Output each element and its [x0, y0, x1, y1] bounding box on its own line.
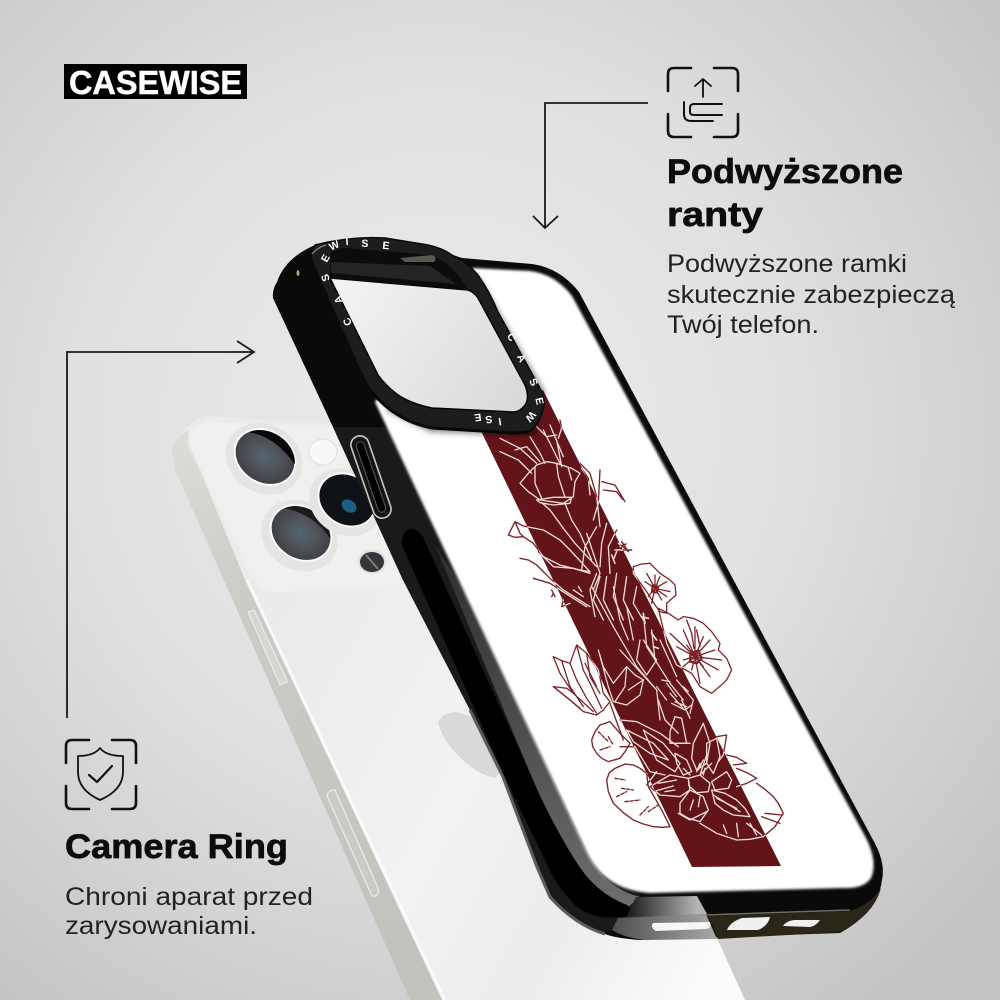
phone body	[172, 416, 745, 1000]
shell outer gray edge	[470, 710, 605, 934]
ring lettering: W	[522, 409, 538, 424]
heading: Podwyższone ranty: ranty	[667, 196, 763, 234]
stripe artwork	[482, 390, 783, 867]
arrow: raised edges	[533, 103, 648, 228]
inner wall	[330, 248, 468, 290]
lens right	[296, 455, 395, 550]
ring lettering: A	[514, 352, 528, 365]
corner highlights	[296, 245, 326, 276]
lidar sensor	[358, 550, 386, 574]
bottom separator	[706, 910, 850, 915]
edge highlight	[247, 580, 445, 1000]
ring lettering: S	[361, 238, 369, 250]
text: camera ring description: zarysowaniami.	[65, 912, 257, 940]
text: raised edges description	[667, 250, 955, 339]
phone side edge	[172, 430, 442, 1000]
text: raised edges description: Twój telefon.	[667, 311, 819, 339]
inner wall shade	[331, 262, 456, 284]
floral line art on stripe	[500, 420, 783, 840]
ring lettering: S	[485, 413, 493, 425]
white front face with soft edge	[375, 268, 874, 893]
ring lettering: I	[345, 236, 349, 248]
side inner gray band	[435, 545, 640, 908]
icon: raised edges	[668, 68, 738, 137]
ring lower edge	[372, 392, 528, 433]
heading: Podwyższone ranty: Podwyższone	[667, 153, 903, 191]
lens opening	[330, 278, 528, 412]
lens upper left	[212, 408, 316, 509]
flash	[309, 439, 337, 465]
wall highlight	[400, 255, 436, 262]
maroon stripe	[482, 390, 781, 867]
ring lettering: A	[332, 293, 346, 306]
ring lettering: E	[532, 397, 546, 406]
bottom lower band light	[612, 914, 717, 940]
volume button	[348, 433, 394, 521]
ring lettering: S	[319, 272, 333, 283]
camera plateau	[188, 422, 405, 592]
logo: CASEWISE: CASEWISE	[69, 64, 242, 101]
text: camera ring description: Chroni aparat przed	[65, 883, 313, 911]
shell lower tint	[333, 427, 640, 933]
ring lettering: C	[341, 315, 355, 328]
ring lettering: E	[474, 411, 482, 423]
ring lettering: C	[504, 331, 518, 344]
ring body	[312, 238, 544, 433]
ring lettering	[319, 236, 546, 427]
apple logo	[438, 712, 510, 778]
text: raised edges description: Podwyższone ramki	[667, 250, 907, 278]
ring shadow	[385, 275, 545, 436]
camera ring	[296, 236, 546, 436]
arrow: camera ring	[67, 341, 254, 718]
side button upper	[248, 610, 287, 685]
ring lettering: E	[319, 252, 333, 265]
ring lettering: I	[498, 415, 502, 427]
heading: Podwyższone ranty	[667, 153, 903, 234]
heading: Camera Ring: Camera Ring	[65, 828, 288, 866]
black case	[273, 245, 883, 940]
ring lettering: S	[526, 377, 540, 388]
bottom upper band light	[626, 896, 707, 918]
ring lettering: W	[327, 238, 342, 253]
bottom lower band dark	[708, 888, 881, 939]
side button lower	[327, 790, 378, 896]
charging and speaker ports	[652, 917, 820, 931]
text: raised edges description: skutecznie zabezpieczą	[667, 281, 955, 309]
text: camera ring description	[65, 883, 313, 940]
side inner black slot	[402, 529, 632, 918]
case outer shell	[273, 245, 883, 940]
floral line art outside stripe	[500, 420, 783, 840]
lens lower	[247, 485, 351, 586]
ring lettering: E	[382, 240, 390, 252]
white phone: back with cameras	[172, 408, 745, 1000]
icon: shield	[66, 740, 136, 809]
